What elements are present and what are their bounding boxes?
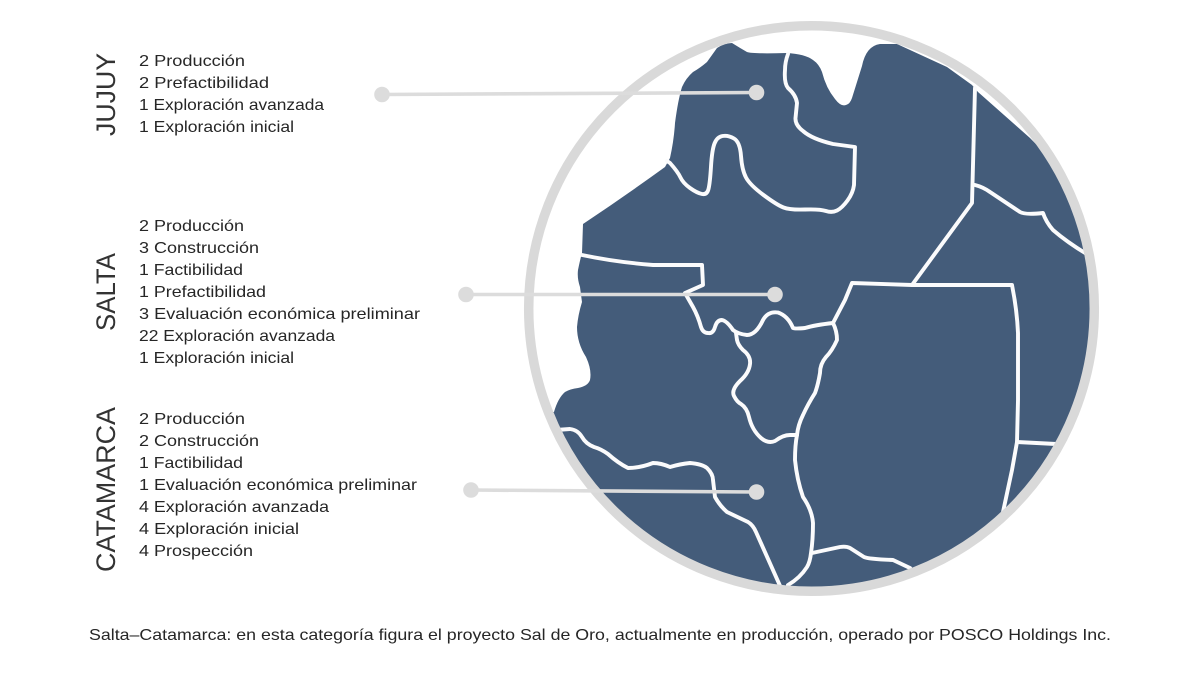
list: Jujuy xyxy=(139,53,324,136)
list: Catamarca: 4 Exploración avanzada xyxy=(139,499,329,516)
list: Salta: 3 Evaluación económica preliminar xyxy=(139,306,420,323)
list: Catamarca: 1 Factibilidad xyxy=(139,455,243,472)
list: Salta: 2 Producción xyxy=(139,218,244,235)
ring xyxy=(529,26,1094,591)
list: Catamarca: 2 Producción xyxy=(139,411,245,428)
list: Jujuy: 2 Prefactibilidad xyxy=(139,75,269,92)
list: Salta: 1 Factibilidad xyxy=(139,262,243,279)
list: Catamarca: 4 Exploración inicial xyxy=(139,521,299,538)
list: Catamarca: 1 Evaluación económica preliminar xyxy=(139,477,417,494)
list: Catamarca xyxy=(139,411,417,560)
heading: Catamarca: CATAMARCA xyxy=(91,407,121,572)
list: Salta: 3 Construcción xyxy=(139,240,259,257)
map: provinces xyxy=(554,43,1090,586)
list: Salta: 1 Prefactibilidad xyxy=(139,284,266,301)
heading: Salta: SALTA xyxy=(91,253,121,331)
list: Salta xyxy=(139,218,420,367)
list: Catamarca: 4 Prospección xyxy=(139,543,253,560)
list: Salta: 1 Exploración inicial xyxy=(139,350,294,367)
map landmass xyxy=(554,43,1090,586)
list: Jujuy: 1 Exploración avanzada xyxy=(139,97,324,114)
list: Jujuy: 1 Exploración inicial xyxy=(139,119,294,136)
list: Salta: 22 Exploración avanzada xyxy=(139,328,335,345)
circular map xyxy=(524,21,1099,596)
provincial borders xyxy=(556,54,1090,588)
heading: Jujuy: JUJUY xyxy=(91,53,121,136)
list: Catamarca: 2 Construcción xyxy=(139,433,259,450)
footnote: Salta–Catamarca: en esta categoría figura el proyecto Sal de Oro, actualmente en producción, operado por POSCO Holdings Inc. xyxy=(89,627,1111,644)
connector: Jujuy xyxy=(374,85,764,102)
connector: Catamarca xyxy=(463,482,764,500)
connector: Salta xyxy=(458,287,783,302)
list: Jujuy: 2 Producción xyxy=(139,53,245,70)
